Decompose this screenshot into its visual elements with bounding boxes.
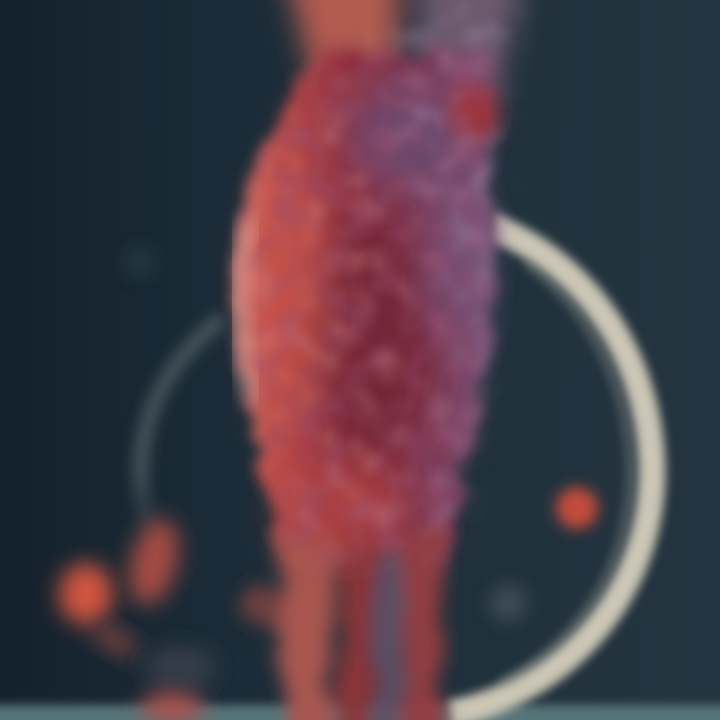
body silhouette	[234, 55, 495, 560]
lower strands	[244, 530, 446, 720]
warm flecks left side	[257, 120, 406, 526]
faint background cell right	[490, 585, 526, 621]
lilac flecks right side	[387, 22, 507, 532]
body tonal masses	[262, 85, 475, 545]
ring dim left arc	[141, 318, 222, 552]
top strands	[285, 0, 525, 110]
ring	[141, 226, 652, 714]
left highlight edge	[239, 220, 252, 400]
ring inner shading	[500, 262, 630, 684]
faint background cell left	[125, 247, 155, 277]
mottled texture	[242, 42, 494, 564]
red cell cluster bottom left	[59, 514, 216, 720]
red cell right	[556, 487, 598, 529]
floor strip	[0, 705, 720, 720]
main body: cell column	[220, 0, 536, 720]
red spot upper right	[450, 82, 498, 142]
ring bright right arc	[450, 226, 652, 714]
